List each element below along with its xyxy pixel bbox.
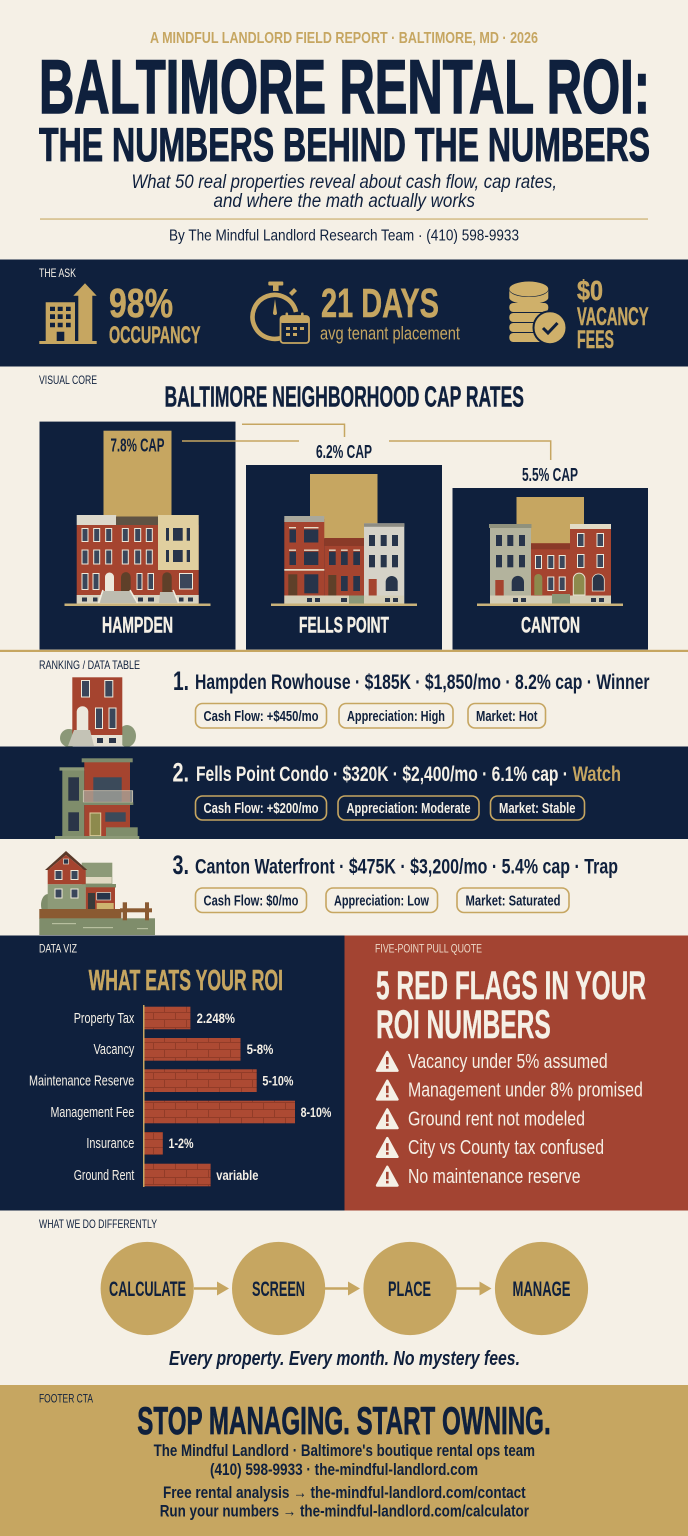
- step: screen: [232, 1242, 325, 1335]
- cap bar: canton: [516, 497, 584, 545]
- subtitle: and where the math actually works: [214, 190, 475, 212]
- flag 3: Ground rent not modeled: [408, 1108, 585, 1130]
- title: [39, 45, 650, 172]
- rank text: [173, 666, 650, 696]
- flag 1: Vacancy under 5% assumed: [408, 1051, 608, 1073]
- contact lines: Free rental analysis → the-mindful-landlord.com/contact: [163, 1483, 526, 1502]
- bar: insurance: Insurance: [86, 1136, 134, 1152]
- section label: visual core: VISUAL CORE: [39, 373, 97, 387]
- bar: maintenance reserve: 5-10%: [262, 1072, 294, 1088]
- label: canton: CANTON: [521, 613, 580, 638]
- stat: occupancy: 98%: [109, 280, 173, 326]
- stat: vacancy fees: $0: [577, 275, 603, 306]
- bar: management fee: 8-10%: [301, 1104, 332, 1120]
- contact lines: The Mindful Landlord · Baltimore's boutique rental ops team: [154, 1441, 535, 1460]
- panel: ranking row 2: [0, 746, 688, 839]
- rank text: 2.: [172, 758, 189, 788]
- bar chart: [29, 1005, 332, 1187]
- panel: red flags: [344, 936, 688, 1210]
- flag 5: [377, 1166, 580, 1188]
- byline: By The Mindful Landlord Research Team · (410) 598-9933: [169, 228, 519, 244]
- bar: vacancy: Vacancy: [94, 1042, 135, 1058]
- panel: ranking row 1: [39, 658, 650, 747]
- step: place: PLACE: [388, 1278, 431, 1301]
- icon: building with up arrow: [39, 283, 97, 344]
- bar: property tax: [74, 1007, 235, 1029]
- rank text: [172, 850, 618, 880]
- pills: [196, 888, 569, 912]
- bar: ground rent: Ground Rent: [74, 1168, 134, 1184]
- chart heading: WHAT EATS YOUR ROI: [89, 965, 283, 997]
- pills: Cash Flow: +$450/mo: [204, 709, 319, 725]
- tagline: Every property. Every month. No mystery fees.: [169, 1348, 520, 1370]
- footer cta: [0, 1385, 688, 1536]
- step: manage: [495, 1242, 588, 1335]
- panel: canton: [452, 488, 648, 650]
- bar: maintenance reserve: [29, 1069, 294, 1092]
- bar: vacancy: 5-8%: [247, 1041, 274, 1057]
- process flow: [101, 1242, 588, 1335]
- step: manage: MANAGE: [512, 1278, 570, 1301]
- section label: RANKING / DATA TABLE: [39, 658, 140, 672]
- panel: hampden: [40, 422, 236, 650]
- label: fells point: FELLS POINT: [299, 613, 389, 638]
- arrow: [456, 1282, 492, 1296]
- pills: [196, 704, 546, 728]
- rank text: 1.: [173, 666, 189, 696]
- flag 4: City vs County tax confused: [408, 1137, 604, 1159]
- eyebrow: A MINDFUL LANDLORD FIELD REPORT · BALTIMORE, MD · 2026: [150, 30, 538, 47]
- icon: canton waterfront house: [39, 851, 155, 935]
- bar: management fee: [50, 1101, 332, 1123]
- panel: the ask: [0, 260, 688, 366]
- bar: insurance: [86, 1132, 194, 1155]
- label: 7.8% cap: 7.8% CAP: [110, 436, 164, 456]
- bar: ground rent: [74, 1164, 259, 1186]
- stat: vacancy fees: FEES: [577, 326, 614, 354]
- step: place: [363, 1242, 457, 1335]
- contact lines: Run your numbers → the-mindful-landlord.com/calculator: [160, 1502, 529, 1521]
- rank text: [172, 758, 621, 788]
- pills: Cash Flow: $0/mo: [204, 894, 299, 910]
- contact lines: [154, 1441, 535, 1521]
- rank text: 3.: [172, 850, 189, 880]
- section label: what we do differently: WHAT WE DO DIFFERENTLY: [39, 1217, 157, 1231]
- stat: tenant placement: [320, 280, 460, 344]
- pull quote heading: ROI NUMBERS: [376, 1003, 551, 1047]
- flag 5: No maintenance reserve: [408, 1166, 580, 1188]
- bar: maintenance reserve: Maintenance Reserve: [29, 1074, 134, 1090]
- step: calculate: [101, 1242, 194, 1335]
- subtitle: [132, 171, 557, 212]
- pills: Appreciation: Low: [334, 894, 430, 910]
- pills: Market: Stable: [499, 801, 576, 817]
- step: screen: SCREEN: [252, 1278, 305, 1301]
- arrow: [325, 1282, 360, 1296]
- step: calculate: CALCULATE: [109, 1278, 186, 1301]
- flag 3: [377, 1108, 585, 1130]
- label: hampden: HAMPDEN: [102, 613, 173, 638]
- building: canton rowhouses: [477, 524, 623, 606]
- contact lines: (410) 598-9933 · the-mindful-landlord.com: [210, 1460, 478, 1479]
- section label: FIVE-POINT PULL QUOTE: [375, 942, 482, 956]
- section label: DATA VIZ: [39, 942, 77, 956]
- building: fells point rowhouses: [271, 516, 417, 606]
- section label: THE ASK: [39, 266, 76, 280]
- icon: fells point condo: [55, 758, 139, 839]
- panel: data viz: [0, 936, 344, 1210]
- pills: [196, 796, 584, 820]
- arrow: [194, 1282, 229, 1296]
- stat: occupancy: OCCUPANCY: [109, 322, 200, 349]
- stat: tenant placement: avg tenant placement: [320, 322, 460, 344]
- pills: Cash Flow: +$200/mo: [204, 801, 319, 817]
- cap bar: hampden: [104, 431, 172, 517]
- icon: hampden house: [60, 677, 136, 747]
- rank text: Fells Point Condo · $320K · $2,400/mo · 6.1% cap ·: [196, 763, 568, 786]
- bar: vacancy: [94, 1038, 274, 1061]
- stat: occupancy: [109, 280, 200, 349]
- pull quote heading: [376, 964, 646, 1047]
- pills: Market: Saturated: [466, 894, 560, 910]
- section label: FOOTER CTA: [39, 1392, 93, 1406]
- header: [39, 30, 650, 244]
- pills: Market: Hot: [476, 709, 538, 725]
- subtitle: What 50 real properties reveal about cash flow, cap rates,: [132, 171, 557, 193]
- icon: stopwatch and calendar: [253, 282, 309, 343]
- icon: coin stack with check: [509, 282, 566, 344]
- cap bar: fells point: [310, 474, 378, 539]
- connector lines and cap labels: [182, 424, 578, 485]
- bar: management fee: Management Fee: [50, 1105, 134, 1121]
- bar: property tax: Property Tax: [74, 1011, 135, 1027]
- pills: Appreciation: Moderate: [346, 801, 470, 817]
- stat: vacancy fees: [577, 275, 649, 354]
- bar: ground rent: variable: [216, 1167, 259, 1183]
- connector lines and cap labels: 6.2% CAP: [316, 442, 372, 462]
- panel: fells point: [246, 465, 442, 650]
- connector lines and cap labels: 5.5% CAP: [522, 465, 578, 485]
- bar: property tax: 2.248%: [197, 1010, 235, 1026]
- building: hampden rowhouses: [64, 515, 210, 606]
- rank text: Watch: [573, 763, 621, 786]
- pills: Appreciation: High: [347, 709, 445, 725]
- stat: tenant placement: 21 DAYS: [321, 280, 439, 326]
- bar: insurance: 1-2%: [168, 1135, 194, 1151]
- panel: ranking row 3: [39, 850, 618, 935]
